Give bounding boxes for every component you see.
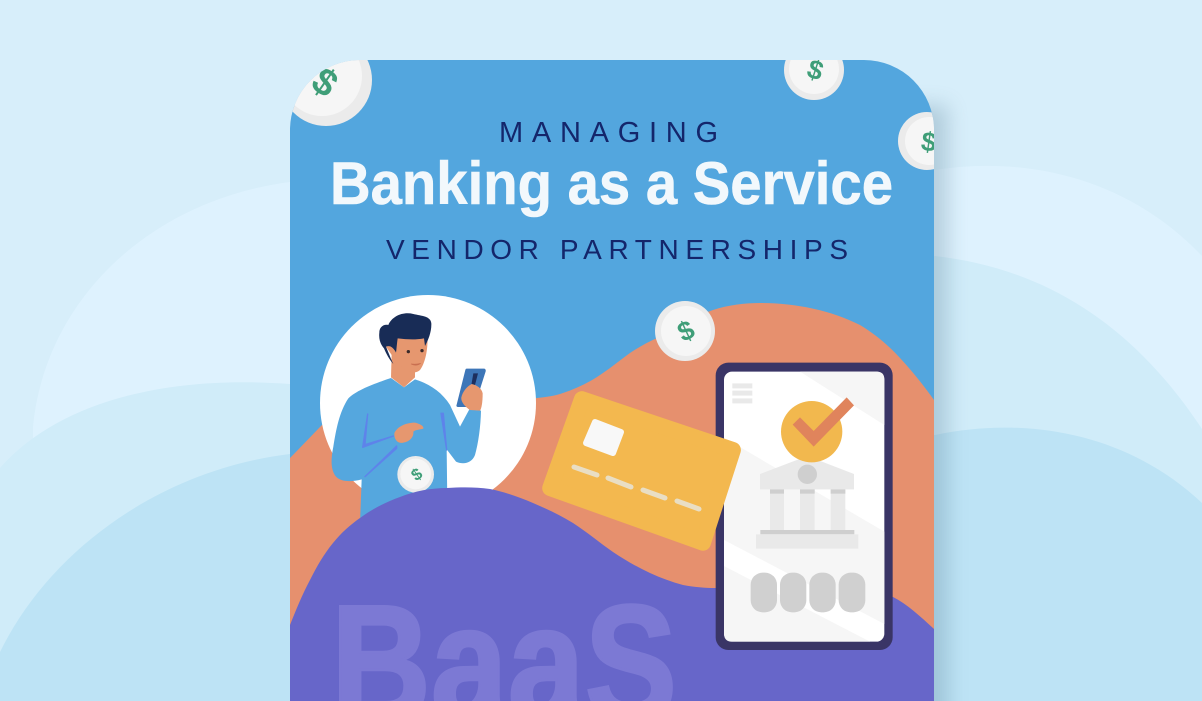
card number dashes [574,467,699,509]
menu icon [732,383,752,403]
coin: right edge [898,112,934,170]
coin on shirt [397,456,434,493]
white circle behind person [320,295,536,511]
coin: centre: $ [673,314,699,348]
coin: centre [655,301,715,361]
coin: top left [292,60,372,126]
eyes and mouth [407,350,410,353]
person [332,313,486,523]
phone in hand [456,369,486,407]
neck [391,353,415,387]
check badge [781,397,854,462]
coin: right edge: $ [919,126,938,158]
card chip [586,422,621,453]
card panel [280,34,956,701]
hair [379,313,431,364]
orange wave [290,303,934,629]
coin: top right: $ [804,53,827,87]
pointing hand [394,423,423,443]
title line 3: VENDOR PARTNERSHIPS [386,234,848,265]
holding hand [461,384,483,411]
title line 2: Banking as a Service [330,150,893,217]
phone device [716,363,893,650]
screen stripes [724,372,884,642]
title line 1: MANAGING [499,117,718,149]
sleeve folds [363,413,447,477]
ear [386,346,396,355]
title [330,117,893,265]
coin: top right [784,60,844,100]
sweater [332,378,481,523]
coin on shirt: $ [408,464,427,485]
pin keys [751,573,865,612]
purple wave [290,487,934,701]
bank icon [756,456,858,549]
coin: top left: $ [304,60,345,106]
credit card [550,399,733,543]
face [395,333,428,372]
